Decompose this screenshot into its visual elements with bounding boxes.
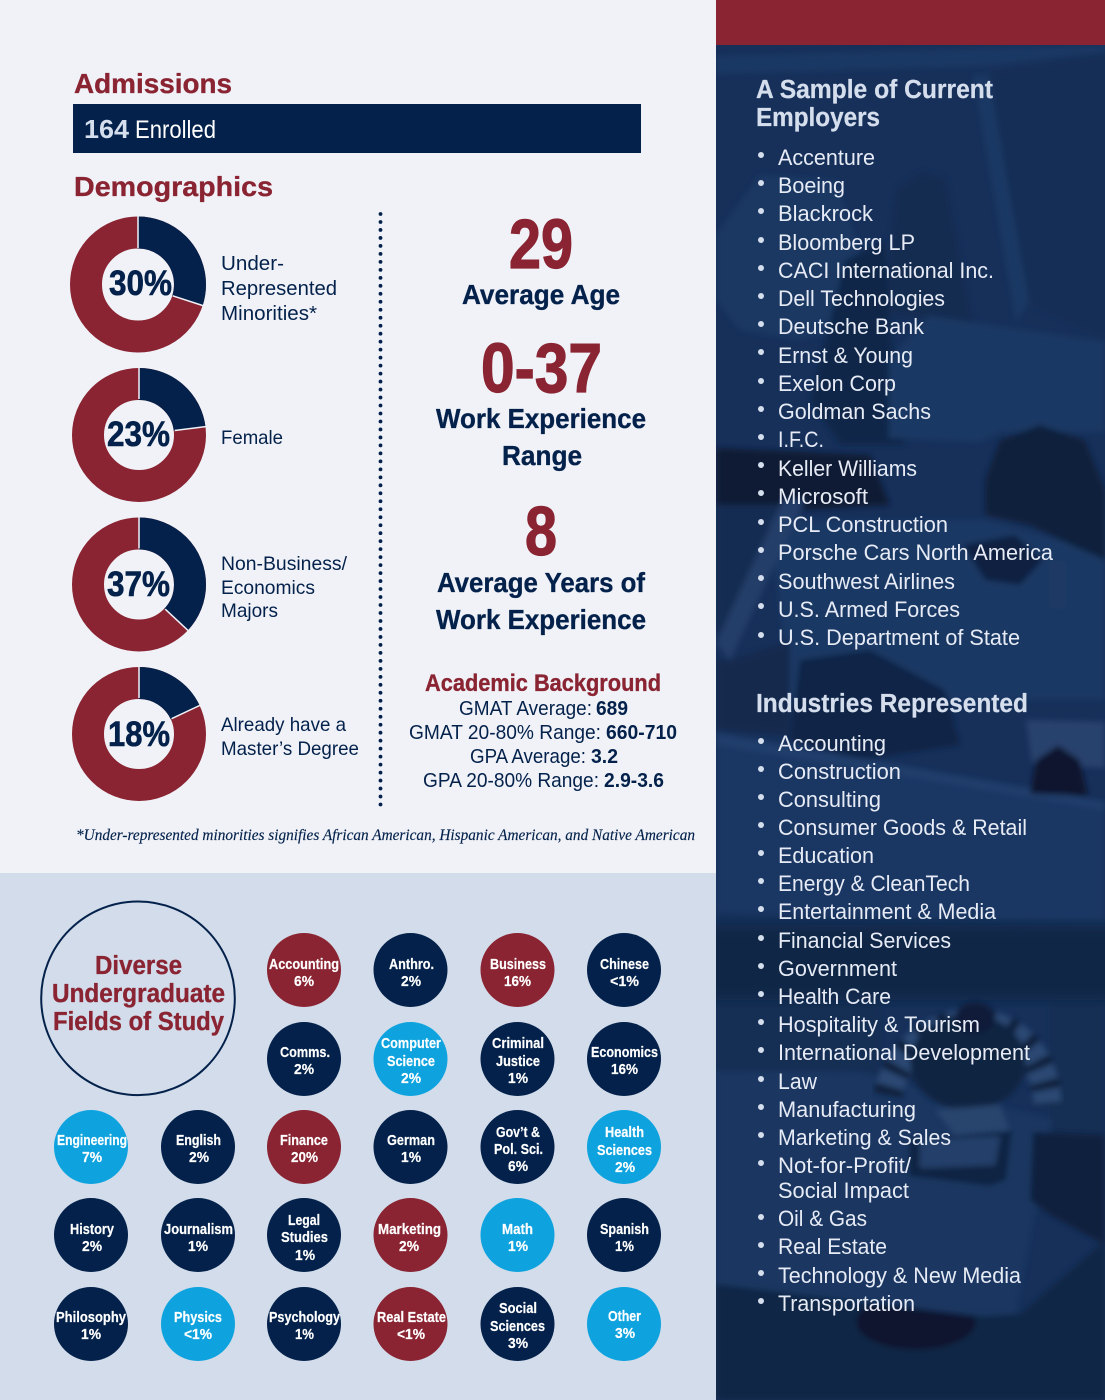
field: Philosophy 1%: 1% — [81, 1326, 101, 1343]
list: industries: Social Impact — [778, 1178, 909, 1203]
field: Health Sciences 2% — [587, 1110, 661, 1184]
list: industries: Financial Services — [778, 928, 951, 953]
field: Physics <1%: Physics — [174, 1309, 222, 1326]
field: Spanish 1% — [587, 1198, 661, 1272]
field: History 2%: 2% — [82, 1238, 102, 1255]
field: Health Sciences 2%: Health — [605, 1124, 644, 1141]
list: industries: Consumer Goods & Retail — [778, 815, 1027, 840]
field: Spanish 1%: Spanish — [600, 1221, 649, 1238]
field: Math 1% — [480, 1198, 554, 1272]
list: current employers: I.F.C. — [778, 427, 824, 452]
stat: work experience range: Range — [502, 440, 582, 471]
list: current employers: Boeing — [778, 173, 845, 198]
list: current employers: Ernst & Young — [778, 343, 913, 368]
list: current employers: U.S. Armed Forces — [778, 597, 960, 622]
list: current employers: CACI International Inc. — [778, 258, 994, 283]
field: Chinese <1% — [587, 933, 661, 1007]
field: Legal Studies 1%: Legal — [288, 1212, 320, 1229]
field: Comms. 2%: 2% — [294, 1061, 314, 1078]
field: Accounting 6%: Accounting — [269, 956, 339, 973]
panel: fields of study background — [0, 873, 716, 1400]
list: current employers: PCL Construction — [778, 512, 948, 537]
list: current employers: U.S. Department of State — [778, 625, 1020, 650]
field: Economics 16%: Economics — [591, 1044, 658, 1061]
list: current employers: Dell Technologies — [778, 286, 945, 311]
list: current employers: Microsoft — [778, 484, 868, 509]
panel: top section background — [0, 0, 716, 873]
enrolled bar — [73, 104, 641, 153]
field: German 1% — [374, 1110, 448, 1184]
donut: 37% non-business majors — [88, 516, 190, 636]
field: Journalism 1%: Journalism — [164, 1221, 233, 1238]
list: industries: Law — [778, 1069, 817, 1094]
field: Social Sciences 3%: Sciences — [490, 1318, 545, 1335]
heading: a sample of current employers: A Sample of Current — [756, 76, 993, 104]
label: under-represented minorities: Under- — [221, 252, 284, 275]
heading: a sample of current employers: Employers — [756, 104, 880, 132]
label: non-business economics majors: Economics — [221, 577, 315, 599]
stat: average years of work experience — [436, 492, 646, 635]
heading: Admissions: Admissions — [74, 68, 232, 99]
stat: average age: 29 — [509, 205, 573, 283]
label: non-business economics majors: Non-Business/ — [221, 553, 348, 575]
field: Business 16% — [480, 933, 554, 1007]
field: Finance 20% — [267, 1110, 341, 1184]
field: Computer Science 2%: 2% — [401, 1070, 421, 1087]
list: industries: Oil & Gas — [778, 1206, 867, 1231]
field: Anthro. 2%: 2% — [401, 973, 421, 990]
field: Computer Science 2%: Science — [387, 1053, 435, 1070]
field: Spanish 1%: 1% — [615, 1238, 634, 1255]
list: industries: Marketing & Sales — [778, 1125, 951, 1150]
field: Other 3%: Other — [608, 1308, 641, 1325]
donut: 30% under-represented minorities — [86, 215, 204, 336]
field: Other 3% — [587, 1287, 661, 1361]
list: industries: Accounting — [778, 731, 886, 756]
list: industries: Transportation — [778, 1291, 915, 1316]
list: industries: Education — [778, 843, 874, 868]
field: Real Estate <1% — [374, 1287, 448, 1361]
field: History 2%: History — [70, 1221, 115, 1238]
academic background: GPA Average: — [470, 745, 586, 768]
field: Engineering 7%: 7% — [82, 1149, 102, 1166]
field: Math 1%: 1% — [508, 1238, 528, 1255]
list: current employers: Bloomberg LP — [778, 230, 915, 255]
list: industries — [758, 731, 1030, 1316]
donut: 37% non-business majors: 37% — [107, 565, 170, 604]
list: industries: Consulting — [778, 787, 881, 812]
field: Physics <1% — [161, 1287, 235, 1361]
field: German 1%: 1% — [401, 1149, 421, 1166]
field: Anthro. 2% — [374, 933, 448, 1007]
field: Psychology 1% — [267, 1287, 341, 1361]
stat: average years of work experience: Average Years of — [437, 567, 646, 598]
field: Gov't & Pol. Sci. 6%: Gov’t & — [496, 1124, 540, 1141]
list: industries: Government — [778, 956, 897, 981]
academic background — [409, 670, 677, 792]
heading: Demographics: Demographics — [74, 171, 273, 202]
list: current employers: Southwest Airlines — [778, 569, 955, 594]
academic background: 660-710 — [606, 721, 677, 744]
label: already have a master's degree: Master’s Degree — [221, 738, 359, 760]
field: Philosophy 1% — [54, 1287, 128, 1361]
field: Real Estate <1%: <1% — [397, 1326, 425, 1343]
stat: average age — [462, 205, 620, 310]
field: Legal Studies 1%: 1% — [295, 1247, 315, 1264]
field: Psychology 1%: Psychology — [269, 1309, 341, 1326]
field: History 2% — [54, 1198, 128, 1272]
icon: striped person at laptop — [888, 1002, 1048, 1135]
list: industries: Energy & CleanTech — [778, 871, 970, 896]
field: Criminal Justice 1% — [480, 1022, 554, 1096]
heading: a sample of current employers — [756, 76, 993, 132]
list: current employers: Keller Williams — [778, 456, 917, 481]
donut: 18% master's degree: 18% — [108, 715, 170, 754]
donut: 30% under-represented minorities: 30% — [109, 264, 172, 303]
list: industries: Not-for-Profit/ — [778, 1153, 912, 1178]
stat: work experience range — [436, 329, 646, 471]
field: Marketing 2% — [374, 1198, 448, 1272]
field: Marketing 2%: Marketing — [378, 1221, 441, 1238]
field: Gov't & Pol. Sci. 6% — [480, 1110, 554, 1184]
stat: average years of work experience: Work Experience — [436, 604, 646, 635]
panel: right column photo background — [700, 45, 1105, 1400]
field: Criminal Justice 1%: 1% — [508, 1070, 528, 1087]
field: Gov't & Pol. Sci. 6%: 6% — [508, 1158, 528, 1175]
donut: 23% female — [88, 366, 207, 486]
field: Economics 16% — [587, 1022, 661, 1096]
footnote: *Under-represented minorities signifies African American, Hispanic American, and Native American — [76, 827, 695, 844]
label: non-business economics majors: Majors — [221, 600, 278, 622]
label: female: Female — [221, 427, 283, 449]
field: Health Sciences 2%: 2% — [615, 1159, 635, 1176]
field: Criminal Justice 1%: Criminal — [492, 1035, 544, 1052]
field: Social Sciences 3%: Social — [499, 1300, 537, 1317]
academic background: 689 — [596, 697, 628, 720]
callout circle: diverse undergraduate fields of study: Fields of Study — [53, 1008, 225, 1036]
field: Physics <1%: <1% — [184, 1326, 212, 1343]
field: Business 16%: 16% — [504, 973, 531, 990]
list: current employers: Porsche Cars North America — [778, 540, 1054, 565]
list: industries: Real Estate — [778, 1234, 887, 1259]
field: Chinese <1%: <1% — [610, 973, 639, 990]
label: non-business economics majors — [221, 553, 348, 622]
list: current employers: Deutsche Bank — [778, 314, 925, 339]
label: under-represented minorities: Represented — [221, 277, 337, 300]
field: Journalism 1% — [161, 1198, 235, 1272]
list: current employers: Exelon Corp — [778, 371, 896, 396]
field: Computer Science 2%: Computer — [381, 1035, 441, 1052]
label: already have a master's degree: Already have a — [221, 714, 346, 736]
field: Social Sciences 3%: 3% — [508, 1335, 528, 1352]
field: Chinese <1%: Chinese — [600, 956, 649, 973]
academic background: 3.2 — [591, 745, 618, 768]
heading: industries represented: Industries Represented — [756, 690, 1028, 718]
enrolled bar: Enrolled — [135, 116, 216, 144]
list: industries: Health Care — [778, 984, 891, 1009]
field: Anthro. 2%: Anthro. — [389, 956, 434, 973]
field: Engineering 7%: Engineering — [57, 1132, 127, 1149]
list: industries: International Development — [778, 1040, 1030, 1065]
field: Social Sciences 3% — [480, 1287, 554, 1361]
list: current employers: Accenture — [778, 145, 875, 170]
field: Criminal Justice 1%: Justice — [496, 1053, 540, 1070]
top red band — [716, 0, 1105, 45]
list: current employers — [758, 145, 1054, 650]
field: Comms. 2% — [267, 1022, 341, 1096]
stat: average years of work experience: 8 — [525, 492, 557, 570]
field: Legal Studies 1%: Studies — [281, 1229, 328, 1246]
academic background: Academic Background — [425, 670, 661, 697]
donut: 18% master's degree — [88, 665, 201, 785]
field: English 2%: 2% — [189, 1149, 209, 1166]
list: industries: Technology & New Media — [778, 1263, 1022, 1288]
academic background: 2.9-3.6 — [604, 769, 664, 792]
list: industries: Hospitality & Tourism — [778, 1012, 980, 1037]
field: English 2% — [161, 1110, 235, 1184]
stat: average age: Average Age — [462, 279, 620, 310]
field: Real Estate <1%: Real Estate — [377, 1309, 446, 1326]
callout circle: diverse undergraduate fields of study — [41, 902, 235, 1095]
field: Philosophy 1%: Philosophy — [56, 1309, 127, 1326]
callout circle: diverse undergraduate fields of study: Undergraduate — [52, 980, 225, 1008]
list: industries: Construction — [778, 759, 901, 784]
field: Gov't & Pol. Sci. 6%: Pol. Sci. — [494, 1141, 543, 1158]
field: English 2%: English — [176, 1132, 221, 1149]
field: Finance 20%: 20% — [291, 1149, 318, 1166]
field: Psychology 1%: 1% — [295, 1326, 314, 1343]
field: Legal Studies 1% — [267, 1198, 341, 1272]
label: under-represented minorities — [221, 252, 337, 325]
label: already have a master's degree — [221, 714, 359, 760]
field: Accounting 6% — [267, 933, 341, 1007]
field: Comms. 2%: Comms. — [280, 1044, 330, 1061]
field: Other 3%: 3% — [615, 1325, 635, 1342]
stat: work experience range: Work Experience — [436, 403, 646, 434]
field: Journalism 1%: 1% — [188, 1238, 208, 1255]
field: Business 16%: Business — [490, 956, 546, 973]
field: Engineering 7% — [54, 1110, 128, 1184]
callout circle: diverse undergraduate fields of study: Diverse — [95, 952, 182, 980]
list: industries: Manufacturing — [778, 1097, 916, 1122]
enrolled bar: 164 — [84, 114, 130, 144]
field: Math 1%: Math — [502, 1221, 533, 1238]
field: Computer Science 2% — [374, 1022, 448, 1096]
field: Marketing 2%: 2% — [399, 1238, 419, 1255]
academic background: GPA 20-80% Range: — [423, 769, 599, 792]
academic background: GMAT 20-80% Range: — [409, 721, 601, 744]
field: Health Sciences 2%: Sciences — [597, 1142, 652, 1159]
stat: work experience range: 0-37 — [481, 329, 602, 407]
label: under-represented minorities: Minorities* — [221, 302, 317, 325]
field: Economics 16%: 16% — [611, 1061, 638, 1078]
field: Finance 20%: Finance — [280, 1132, 328, 1149]
list: current employers: Blackrock — [778, 201, 874, 226]
donut: 23% female: 23% — [107, 415, 170, 454]
list: current employers: Goldman Sachs — [778, 399, 931, 424]
academic background: GMAT Average: — [459, 697, 592, 720]
field: German 1%: German — [387, 1132, 435, 1149]
list: industries: Entertainment & Media — [778, 899, 997, 924]
field: Accounting 6%: 6% — [294, 973, 314, 990]
